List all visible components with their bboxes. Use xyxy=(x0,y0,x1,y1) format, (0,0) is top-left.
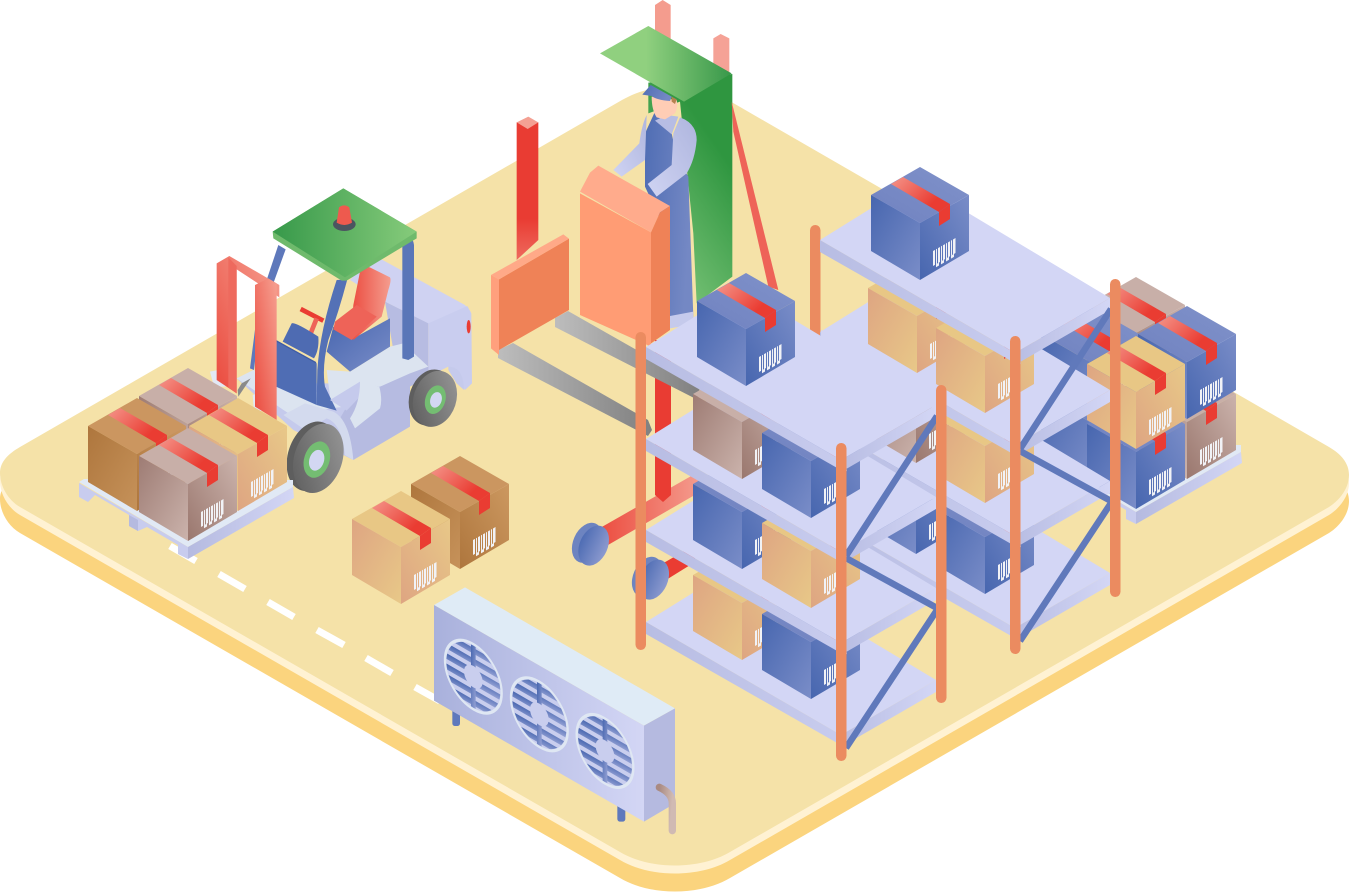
shelf 2 xyxy=(820,273,1110,458)
shelf 4 xyxy=(820,456,1110,641)
shelf 3 xyxy=(646,471,936,656)
shirt chest xyxy=(655,115,678,134)
box: blue rear lower xyxy=(1041,366,1139,479)
posts xyxy=(636,332,946,761)
forks xyxy=(498,311,700,436)
fan 1 xyxy=(445,628,502,726)
hair xyxy=(672,97,677,104)
box: blue rear top xyxy=(1041,306,1139,419)
back pillar xyxy=(250,245,286,370)
beacon xyxy=(333,205,356,231)
forklift xyxy=(210,188,472,500)
fork guide blocks xyxy=(210,369,264,412)
front shelving rack xyxy=(636,273,946,761)
fan 3 xyxy=(577,702,633,800)
box: mauve lower xyxy=(1138,366,1236,479)
box: tan top xyxy=(1087,336,1185,449)
mast tips xyxy=(655,0,729,77)
forklift cab floor xyxy=(237,343,428,417)
boxes level 3 xyxy=(867,350,1034,503)
order picker truck xyxy=(491,0,778,605)
overalls xyxy=(645,112,693,322)
large orange plate xyxy=(580,166,670,347)
pallet xyxy=(1027,444,1242,524)
far arm xyxy=(613,115,647,177)
box: brown xyxy=(411,456,509,569)
head xyxy=(652,97,677,119)
left pallet with boxes xyxy=(79,368,294,559)
worker xyxy=(613,85,697,328)
box: blue top xyxy=(1138,306,1236,419)
small orange plate xyxy=(491,234,569,355)
box on top xyxy=(871,167,969,280)
steering wheel xyxy=(301,309,323,333)
right pallet with boxes xyxy=(1027,277,1242,524)
boxes level 2 xyxy=(868,260,1034,413)
fan 2 xyxy=(511,665,568,763)
seat xyxy=(333,263,391,340)
posts xyxy=(1010,279,1120,654)
red post xyxy=(517,117,538,260)
box: tan right xyxy=(189,398,287,511)
mast xyxy=(217,256,279,420)
dashboard xyxy=(276,323,318,405)
base bars and wheels xyxy=(566,340,700,605)
shelf 1 rear edge patch xyxy=(821,330,936,410)
box on top xyxy=(697,273,795,386)
near arm xyxy=(648,117,697,197)
forklift rear body xyxy=(350,255,472,390)
boxes level 3 xyxy=(693,456,860,608)
rear wheel xyxy=(402,364,464,433)
box: mauve rear xyxy=(139,368,237,481)
boxes level 4 xyxy=(693,547,860,699)
fender and cowl xyxy=(283,367,464,460)
pallet xyxy=(79,479,294,559)
air conditioning unit xyxy=(434,587,675,831)
seat base xyxy=(327,318,390,372)
box: tan xyxy=(352,491,450,604)
cap xyxy=(642,85,672,101)
cross braces xyxy=(1020,309,1111,641)
shoe xyxy=(670,312,693,328)
front wheel xyxy=(278,415,352,500)
shelf 2 xyxy=(646,380,936,565)
forklift rear pillar xyxy=(350,238,407,274)
front pillar xyxy=(317,279,347,411)
pipe xyxy=(659,787,672,831)
forklift body fill xyxy=(237,378,360,460)
forklift rear post xyxy=(402,236,414,360)
box: brown left xyxy=(88,398,186,511)
boxes level 2 xyxy=(693,366,860,518)
road dashes xyxy=(170,546,440,701)
legs xyxy=(452,707,625,822)
shelf 4 xyxy=(646,563,936,748)
boxes level 4 xyxy=(867,441,1034,594)
green back panel xyxy=(648,74,732,303)
box: mauve top xyxy=(1087,277,1185,390)
shelf 3 xyxy=(820,364,1110,549)
rear post xyxy=(810,225,820,545)
cross braces xyxy=(846,416,937,748)
canopy xyxy=(273,188,417,281)
back shelving rack xyxy=(810,167,1120,654)
green roof xyxy=(600,26,732,102)
red strut xyxy=(732,102,778,290)
shelf 1 xyxy=(646,288,936,473)
box: blue lower xyxy=(1087,396,1185,509)
floor boxes xyxy=(352,456,509,604)
shelf 1 xyxy=(820,181,1110,366)
forklift lower body xyxy=(340,367,428,460)
unit casing xyxy=(434,587,675,822)
box: mauve front xyxy=(139,428,237,541)
